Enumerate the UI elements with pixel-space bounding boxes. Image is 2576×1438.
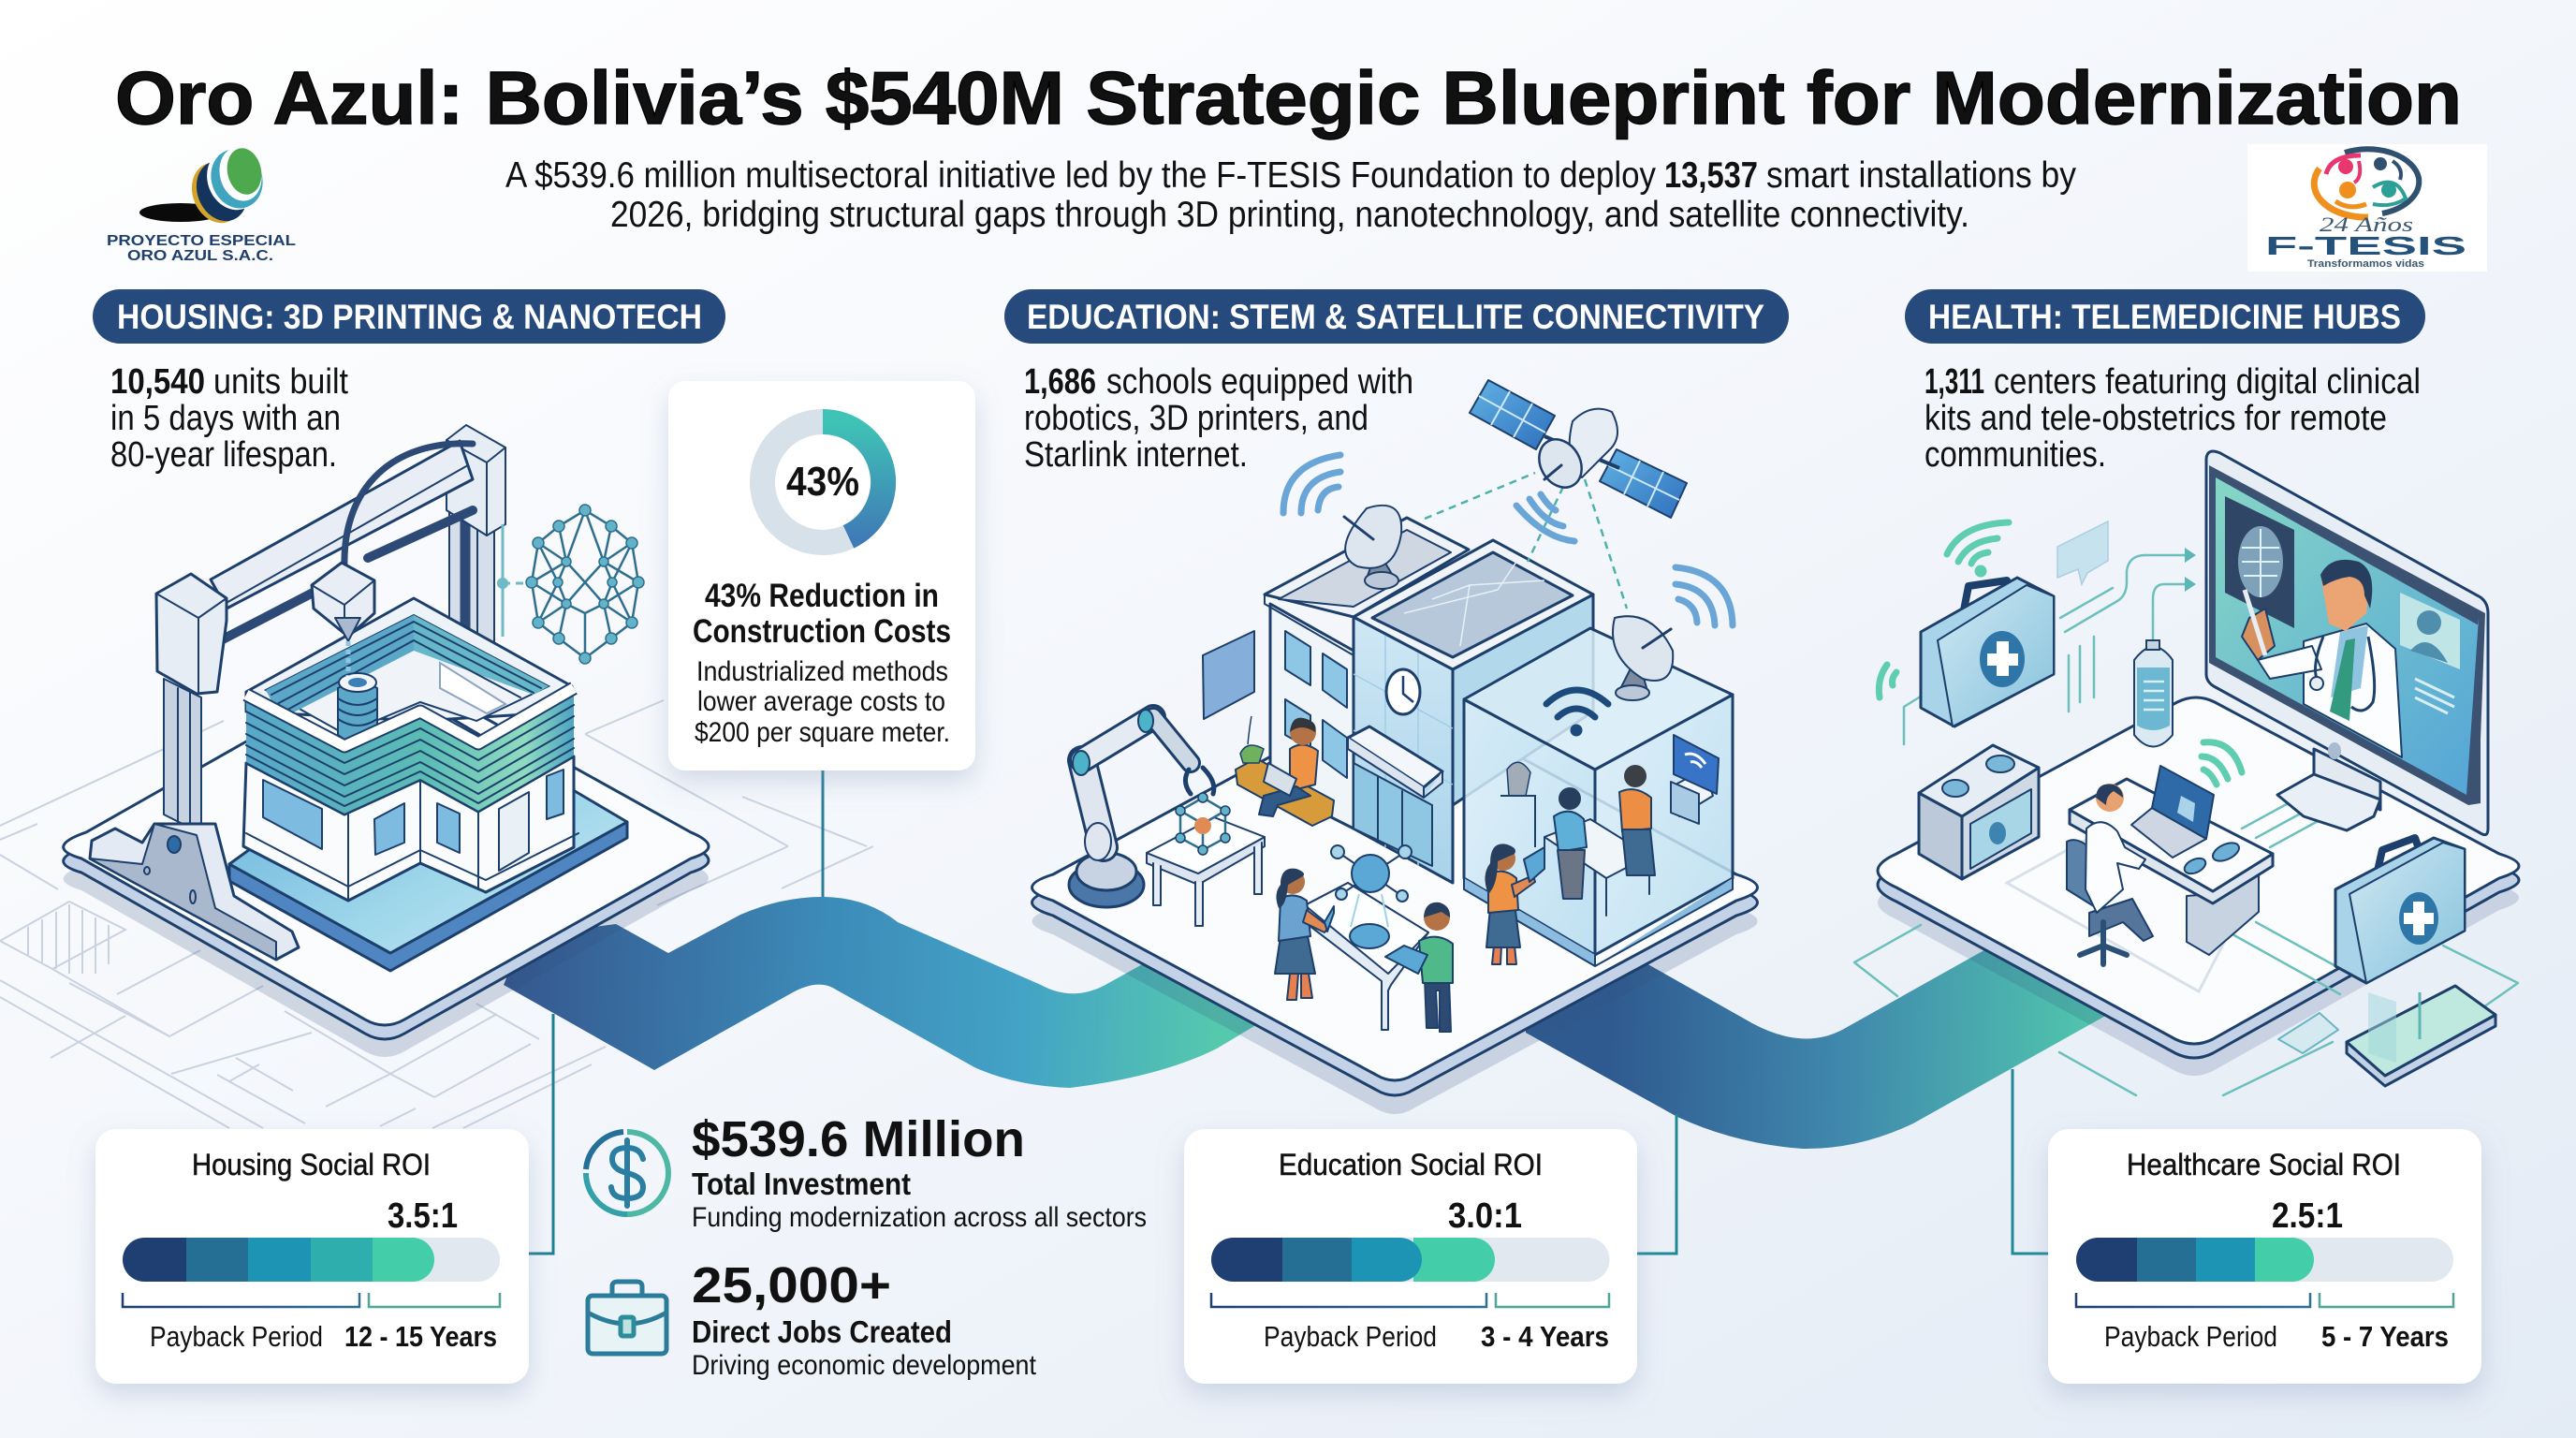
- panel: cost reduction card: Construction Costs: [693, 613, 951, 650]
- data arrows: [2060, 555, 2190, 712]
- illustration: housing 3D printer: [64, 425, 709, 1057]
- icon: nanostructure lattice: [497, 505, 644, 664]
- bar: healthcare ROI: [2076, 1238, 2453, 1282]
- heading pill: education: [1004, 289, 1789, 344]
- monitor: [2206, 451, 2488, 835]
- panel: healthcare ROI: 2.5:1: [2272, 1196, 2343, 1236]
- ribbon: education to health: [1526, 947, 2153, 1149]
- heading pill: housing: HOUSING: 3D PRINTING & NANOTECH: [117, 298, 702, 336]
- heading pill: health: [1905, 289, 2425, 344]
- panel: healthcare ROI: Payback Period: [2104, 1320, 2277, 1353]
- text block: housing: units built: [213, 362, 348, 402]
- student woman with tablet: [1485, 844, 1544, 964]
- stat: direct jobs: Driving economic development: [692, 1350, 1037, 1381]
- panel: housing ROI: Housing Social ROI: [192, 1148, 431, 1181]
- panel: housing ROI: [95, 1129, 529, 1384]
- blueprint background lines: [0, 700, 873, 1128]
- logo: F-TESIS: [2247, 144, 2487, 271]
- text block: health: kits and tele-obstetrics for remote: [1925, 399, 2387, 438]
- stat: direct jobs: [692, 1257, 1037, 1381]
- illustration: health telemedicine: [1854, 451, 2519, 1095]
- hologram table: [1305, 845, 1428, 1030]
- subtitle: smart installations by: [1766, 155, 2076, 196]
- text block: education: [1024, 362, 1413, 475]
- bar: housing ROI: [123, 1238, 500, 1282]
- chat bubble: [2057, 521, 2108, 584]
- oxygen bottle: [2134, 640, 2173, 747]
- panel: housing ROI: Payback Period: [150, 1320, 323, 1353]
- panel: education ROI: Education Social ROI: [1279, 1148, 1543, 1181]
- panel: healthcare ROI: Healthcare Social ROI: [2127, 1148, 2401, 1181]
- school left block: [1265, 518, 1469, 829]
- table with lattice: [1147, 793, 1265, 926]
- connector: healthcare ROI: [2012, 1069, 2048, 1254]
- logo: F-TESIS: Transformamos vidas: [2307, 258, 2424, 270]
- panel: cost reduction card: [668, 381, 975, 770]
- connector: housing ROI: [529, 1014, 553, 1254]
- diagnostic cart: [1919, 745, 2039, 879]
- bar: education ROI: [1211, 1238, 1610, 1282]
- robot arm: [1069, 710, 1214, 907]
- student boy: [1385, 902, 1453, 1032]
- icon: dollar coin: [586, 1132, 668, 1214]
- dish antennas: [1344, 506, 1673, 700]
- medical kit lower: [2335, 838, 2465, 983]
- text block: housing: [110, 362, 348, 475]
- connector: cost card to ribbon: [822, 770, 824, 899]
- panel: housing ROI: 12 - 15 Years: [344, 1320, 497, 1353]
- text block: education: schools equipped with: [1106, 362, 1413, 402]
- wifi upper teal: [1879, 522, 2242, 785]
- chart: 43% donut: 43%: [786, 459, 859, 505]
- glass lab: [1464, 628, 1733, 966]
- panel: education ROI: [1184, 1129, 1637, 1384]
- panel: cost reduction card: 43% Reduction in: [705, 578, 939, 614]
- heading pill: health: HEALTH: TELEMEDICINE HUBS: [1928, 298, 2401, 336]
- text block: housing: in 5 days with an: [110, 399, 341, 438]
- logo: Proyecto Especial Oro Azul: ORO AZUL S.A.C.: [127, 248, 273, 264]
- text block: health: centers featuring digital clinical: [1994, 362, 2421, 402]
- panel: education ROI: Payback Period: [1264, 1320, 1437, 1353]
- panel: housing ROI: 3.5:1: [388, 1196, 458, 1236]
- student girl: [1275, 869, 1334, 1000]
- subtitle: [505, 155, 2076, 235]
- patient inset: [2400, 593, 2460, 669]
- x-ray: [2225, 496, 2294, 628]
- text block: housing: 10,540: [110, 362, 205, 402]
- logo: F-TESIS: 24 Años: [2320, 213, 2413, 236]
- panel: healthcare ROI: 5 - 7 Years: [2321, 1320, 2449, 1353]
- stat: direct jobs: 25,000+: [692, 1257, 891, 1313]
- stat: total investment: [692, 1111, 1147, 1233]
- stat: total investment: $539.6 Million: [692, 1111, 1025, 1167]
- connector: education ROI: [1637, 1114, 1676, 1254]
- stat: total investment: Funding modernization across all sectors: [692, 1202, 1147, 1233]
- smartphone: [2347, 986, 2496, 1086]
- panel: education ROI: 3.0:1: [1448, 1196, 1522, 1236]
- panel: cost reduction card: lower average costs to: [697, 686, 945, 717]
- text block: education: robotics, 3D printers, and: [1024, 399, 1368, 438]
- logo: F-TESIS: F-TESIS: [2265, 231, 2466, 260]
- heading pill: housing: [93, 289, 725, 344]
- text block: education: Starlink internet.: [1024, 435, 1248, 475]
- panel: healthcare ROI: [2048, 1129, 2481, 1384]
- title: Oro Azul: Bolivia’s $540M Strategic Blueprint for Modernization: [115, 56, 2462, 139]
- text block: health: [1925, 362, 2421, 475]
- stat: total investment: Total Investment: [692, 1167, 911, 1201]
- wifi signal arcs: [1283, 455, 1733, 625]
- icon: briefcase: [588, 1282, 666, 1354]
- central tower: [1354, 540, 1593, 883]
- medical kit upper: [1921, 578, 2054, 726]
- subtitle: A $539.6 million multisectoral initiative led by the F-TESIS Foundation to deploy: [505, 155, 1656, 196]
- subtitle: 13,537: [1664, 155, 1758, 196]
- heading pill: education: EDUCATION: STEM & SATELLITE CONNECTIVITY: [1027, 298, 1764, 336]
- entrance: [1348, 726, 1442, 866]
- teal circuit lines: [1854, 693, 2518, 1095]
- illustration: education campus: [1032, 380, 1758, 1114]
- wifi on glass: [1546, 690, 1608, 733]
- text block: health: communities.: [1925, 435, 2106, 475]
- text block: health: 1,311: [1925, 362, 1984, 402]
- logo: Proyecto Especial Oro Azul: [107, 141, 296, 264]
- small sensor tile: [2278, 1013, 2338, 1053]
- subtitle: 2026, bridging structural gaps through 3D printing, nanotechnology, and satellite connectivity.: [610, 195, 1969, 235]
- satellite: [1470, 380, 1687, 518]
- text block: education: 1,686: [1024, 362, 1096, 402]
- stat: direct jobs: Direct Jobs Created: [692, 1314, 952, 1349]
- panel: cost reduction card: $200 per square meter.: [695, 717, 950, 748]
- ribbon: housing to education: [504, 897, 1310, 1088]
- poster screen: [1203, 631, 1254, 719]
- desk and laptop: [2070, 766, 2273, 955]
- doctor: [2304, 624, 2402, 757]
- seated clinician: [2067, 784, 2153, 964]
- person on bench: [1236, 716, 1334, 826]
- panel: education ROI: 3 - 4 Years: [1481, 1320, 1609, 1353]
- panel: cost reduction card: Industrialized methods: [696, 656, 948, 687]
- chart: 43% donut: [762, 421, 884, 543]
- signal dashes to satellite: [1425, 473, 1627, 609]
- logo: Proyecto Especial Oro Azul: PROYECTO ESPECIAL: [107, 233, 296, 249]
- text block: housing: 80-year lifespan.: [110, 435, 337, 475]
